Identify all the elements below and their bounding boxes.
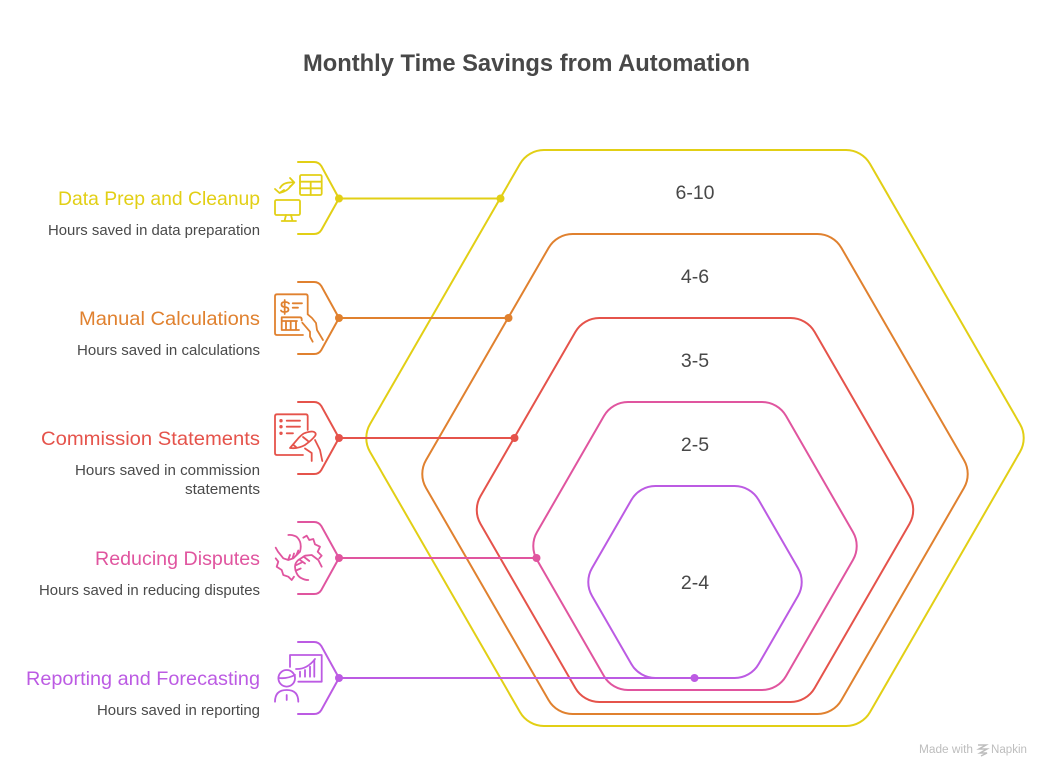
title: Monthly Time Savings from Automation <box>303 50 750 77</box>
hexagon: 6-10 data prep <box>366 150 1024 726</box>
label: reducing disputes: Reducing Disputes <box>95 548 260 570</box>
row: reducing disputes <box>39 522 540 599</box>
hexagon: 3-5 commission statements <box>477 318 913 702</box>
label: reporting and forecasting: Reporting and Forecasting <box>26 668 260 690</box>
description: commission statements: Hours saved in commission <box>75 463 260 479</box>
description: calculations: Hours saved in calculations <box>77 343 260 359</box>
hexagon: 4-6 manual calculations <box>422 234 968 714</box>
icon: presenter with chart <box>275 655 322 702</box>
hexagon: 2-4 reporting <box>588 486 802 678</box>
label: commission statements: Commission Statements <box>41 428 260 450</box>
hexagon: 2-5 reducing disputes <box>533 402 857 690</box>
connector: bracket and leader <box>298 522 540 594</box>
value: 6-10: 6-10 <box>675 182 715 204</box>
value: 2-4: 2-4 <box>681 572 709 594</box>
icon: document with hand <box>275 294 323 342</box>
value: 2-5: 2-5 <box>681 434 709 456</box>
icon: handshake <box>276 535 322 580</box>
description: commission statements: statements <box>185 482 260 498</box>
icon: table and monitor <box>275 175 322 221</box>
description: reducing disputes: Hours saved in reducing disputes <box>39 583 260 599</box>
value: 3-5: 3-5 <box>681 350 709 372</box>
value: 4-6: 4-6 <box>681 266 709 288</box>
icon: document with pen <box>275 414 322 461</box>
row: data prep and cleanup <box>48 162 504 239</box>
label: data prep and cleanup: Data Prep and Cleanup <box>58 188 260 210</box>
connector: bracket and leader <box>298 642 698 714</box>
watermark: made with napkin <box>919 744 1027 756</box>
connector: bracket and leader <box>298 162 504 234</box>
row: commission statements <box>41 402 518 498</box>
connector: bracket and leader <box>298 402 518 474</box>
row: manual calculations <box>77 282 512 359</box>
watermark: made with napkin: Made with <box>919 744 973 756</box>
description: commission statements <box>75 463 260 498</box>
label: manual calculations: Manual Calculations <box>79 308 260 330</box>
watermark: made with napkin: Napkin <box>991 744 1027 756</box>
description: data prep: Hours saved in data preparation <box>48 223 260 239</box>
row: reporting and forecasting <box>26 642 698 719</box>
description: reporting: Hours saved in reporting <box>97 703 260 719</box>
connector: bracket and leader <box>298 282 512 354</box>
